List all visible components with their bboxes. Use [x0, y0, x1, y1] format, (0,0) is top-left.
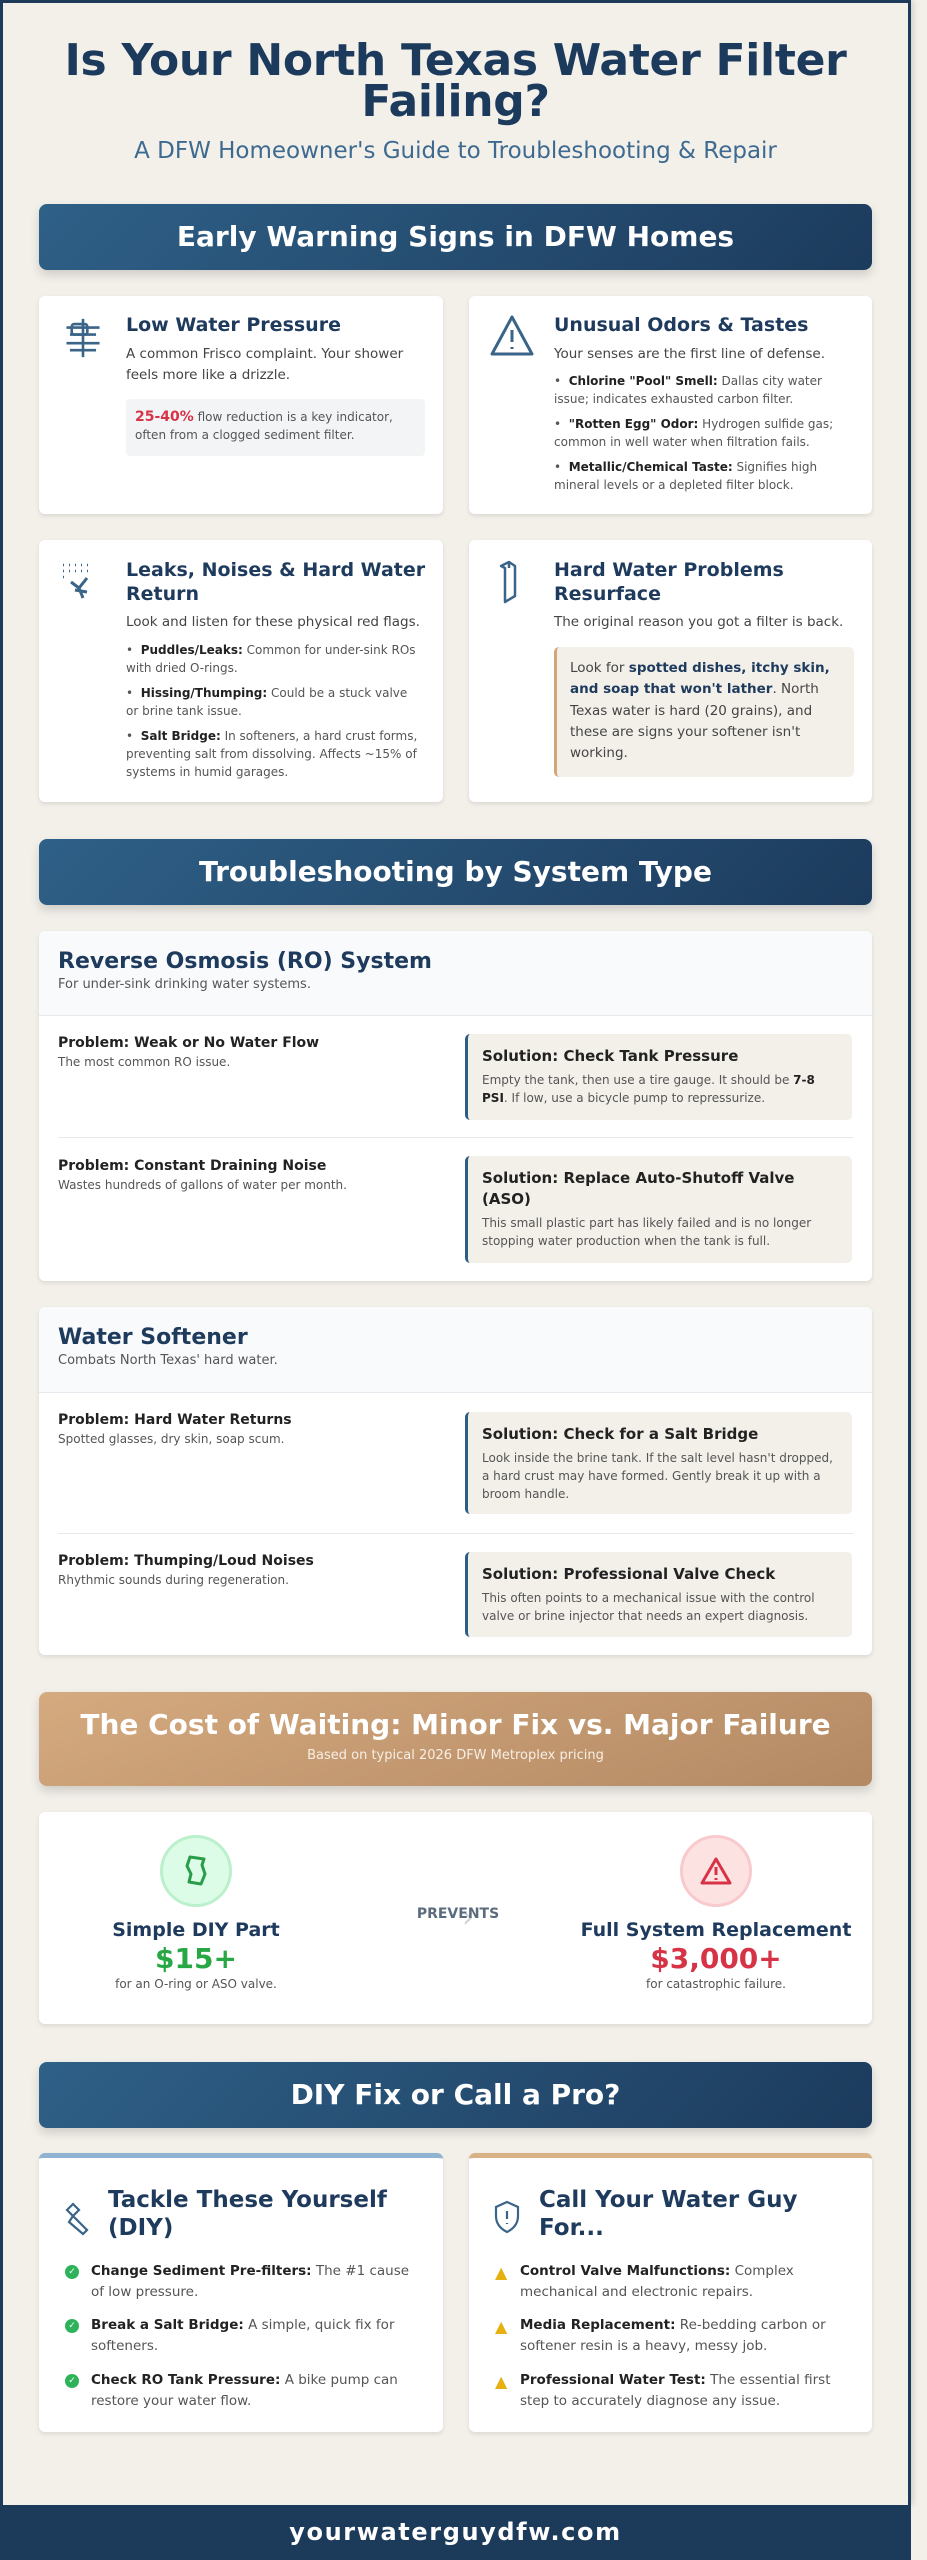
title: Is Your North Texas Water Filter — [64, 35, 847, 86]
problem 1 — [58, 1035, 319, 1069]
bullets: • Chlorine "Pool" Smell: Dallas city water issue; indicates exhausted carbon filter. — [554, 374, 822, 406]
problem 2: Problem: Thumping/Loud Noises — [58, 1553, 314, 1569]
left: DIY part — [112, 1835, 280, 1991]
header: Water Softener — [58, 1325, 248, 1350]
card: low water pressure — [39, 296, 443, 514]
header: Reverse Osmosis (RO) System — [58, 949, 432, 974]
right: replacement: $3,000+ — [650, 1942, 782, 1975]
list: ✓ — [68, 2321, 76, 2331]
list: ▲ — [495, 2372, 507, 2391]
solution 2 — [465, 1156, 852, 1263]
banner: DIY or pro: DIY Fix or Call a Pro? — [291, 2078, 620, 2111]
icon: leak — [63, 564, 88, 598]
problem 1: Problem: Hard Water Returns — [58, 1412, 292, 1428]
solution 1 — [465, 1412, 852, 1514]
icon: pipe — [66, 318, 100, 358]
panel: DIY — [39, 2153, 443, 2432]
footer: yourwaterguydfw.com — [289, 2518, 622, 2546]
arrow: prevents: PREVENTS — [417, 1906, 499, 1922]
banner: DIY or pro — [39, 2062, 872, 2128]
banner: early warning signs — [39, 204, 872, 270]
subtitle: A DFW Homeowner's Guide to Troubleshooting & Repair — [134, 138, 777, 164]
bullets — [126, 643, 418, 779]
list: ✓ — [68, 2376, 76, 2386]
text: Look and listen for these physical red flags. — [126, 614, 420, 630]
banner: cost of waiting — [39, 1692, 872, 1786]
panel: cost comparison — [39, 1812, 872, 2024]
heading: Low Water Pressure — [126, 314, 341, 336]
solution 2: Solution: Professional Valve Check — [482, 1565, 775, 1583]
problem 1 — [58, 1412, 292, 1446]
problem 1: Spotted glasses, dry skin, soap scum. — [58, 1432, 284, 1446]
heading: Leaks, Noises & Hard Water Return — [126, 559, 425, 605]
right: replacement — [581, 1835, 852, 1991]
footer — [0, 2505, 911, 2560]
bullets: • Hissing/Thumping: Could be a stuck valve or brine tank issue. — [126, 686, 407, 718]
heading: Hard Water Problems Resurface — [554, 559, 784, 605]
right: replacement: for catastrophic failure. — [646, 1977, 786, 1991]
arrow: prevents — [417, 1900, 499, 1935]
problem 1: Problem: Weak or No Water Flow — [58, 1035, 319, 1051]
problem 2 — [58, 1158, 347, 1192]
banner: troubleshooting: Troubleshooting by System Type — [199, 855, 712, 888]
solution 1 — [465, 1034, 852, 1120]
card: hard water — [469, 540, 872, 802]
icon: green part — [160, 1835, 232, 1907]
bullets: • Metallic/Chemical Taste: Signifies high mineral levels or a depleted filter block. — [554, 460, 817, 492]
header: For under-sink drinking water systems. — [58, 977, 311, 992]
problem 1: The most common RO issue. — [58, 1055, 230, 1069]
text: Your senses are the first line of defense. — [554, 346, 825, 362]
stat box — [126, 399, 425, 456]
bullets — [554, 374, 833, 492]
list — [495, 2263, 830, 2409]
arrow: prevents: › — [462, 1900, 474, 1935]
banner: troubleshooting — [39, 839, 872, 905]
problem 2: Wastes hundreds of gallons of water per month. — [58, 1178, 347, 1192]
banner: cost of waiting: Based on typical 2026 DFW Metroplex pricing — [307, 1748, 604, 1763]
left: DIY part: $15+ — [155, 1942, 237, 1975]
icon: tools — [66, 2202, 88, 2236]
icon: red warning — [680, 1835, 752, 1907]
panel: RO system — [39, 931, 872, 1281]
list: Control Valve Malfunctions: Complex mechanical and electronic repairs. — [520, 2263, 794, 2300]
list: Check RO Tank Pressure: A bike pump can restore your water flow. — [91, 2372, 398, 2409]
list: ✓ — [68, 2267, 76, 2277]
list: Break a Salt Bridge: A simple, quick fix for softeners. — [91, 2317, 394, 2354]
list: Media Replacement: Re-bedding carbon or softener resin is a heavy, messy job. — [520, 2317, 826, 2354]
quote box — [554, 647, 854, 777]
solution 2: Solution: Replace Auto-Shutoff Valve (ASO) — [482, 1169, 794, 1208]
list: Professional Water Test: The essential first step to accurately diagnose any issue. — [520, 2372, 830, 2409]
header — [39, 1307, 872, 1393]
stat box: 25-40% flow reduction is a key indicator, often from a clogged sediment filter. — [135, 409, 393, 442]
right: replacement: Full System Replacement — [581, 1919, 851, 1941]
list: Change Sediment Pre-filters: The #1 cause of low pressure. — [91, 2263, 409, 2300]
list: ▲ — [495, 2317, 507, 2336]
title: Failing? — [361, 76, 550, 127]
solution 2: This often points to a mechanical issue with the control valve or brine injector that needs an expert diagnosis. — [482, 1591, 815, 1623]
panel: call a pro — [469, 2153, 872, 2432]
banner: cost of waiting: The Cost of Waiting: Minor Fix vs. Major Failure — [80, 1708, 831, 1741]
solution 1: Look inside the brine tank. If the salt level hasn't dropped, a hard crust may have formed. Gently break it up with a broom handle. — [482, 1451, 833, 1501]
problem 2 — [58, 1553, 314, 1587]
header: Combats North Texas' hard water. — [58, 1353, 278, 1368]
bullets: • Puddles/Leaks: Common for under-sink ROs with dried O-rings. — [126, 643, 416, 675]
card: leaks & noises — [39, 540, 443, 802]
bullets: • Salt Bridge: In softeners, a hard crust forms, preventing salt from dissolving. Affects ~15% of systems in humid garages. — [126, 729, 417, 779]
text: A common Frisco complaint. Your shower feels more like a drizzle. — [126, 346, 403, 383]
icon: warning — [490, 315, 534, 356]
solution 2: This small plastic part has likely failed and is no longer stopping water production when the tank is full. — [482, 1216, 811, 1248]
problem 2: Problem: Constant Draining Noise — [58, 1158, 326, 1174]
text: The original reason you got a filter is back. — [554, 614, 843, 630]
icon: glass — [500, 560, 516, 604]
left: DIY part: Simple DIY Part — [112, 1919, 280, 1941]
bullets: • "Rotten Egg" Odor: Hydrogen sulfide gas; common in well water when filtration fails. — [554, 417, 833, 449]
problem 2: Rhythmic sounds during regeneration. — [58, 1573, 289, 1587]
banner: early warning signs: Early Warning Signs in DFW Homes — [177, 220, 734, 253]
quote box: Look for spotted dishes, itchy skin, and soap that won't lather. North Texas water is hard (20 grains), and these are signs your softener isn't working. — [570, 660, 830, 761]
heading: Unusual Odors & Tastes — [554, 314, 808, 336]
header — [39, 931, 872, 1016]
solution 1: Solution: Check for a Salt Bridge — [482, 1425, 758, 1443]
title — [64, 35, 847, 127]
list: ▲ — [495, 2263, 507, 2282]
panel: water softener — [39, 1307, 872, 1655]
solution 1: Solution: Check Tank Pressure — [482, 1047, 738, 1065]
left: DIY part: for an O-ring or ASO valve. — [115, 1977, 277, 1991]
list — [65, 2263, 409, 2409]
solution 2 — [465, 1552, 852, 1637]
card: odors & tastes — [469, 296, 872, 514]
heading: Call Your Water Guy For... — [539, 2187, 798, 2241]
solution 1: Empty the tank, then use a tire gauge. It should be 7-8 PSI. If low, use a bicycle pump to repressurize. — [482, 1073, 815, 1105]
heading: Tackle These Yourself (DIY) — [108, 2187, 387, 2241]
icon: shield — [494, 2200, 520, 2234]
